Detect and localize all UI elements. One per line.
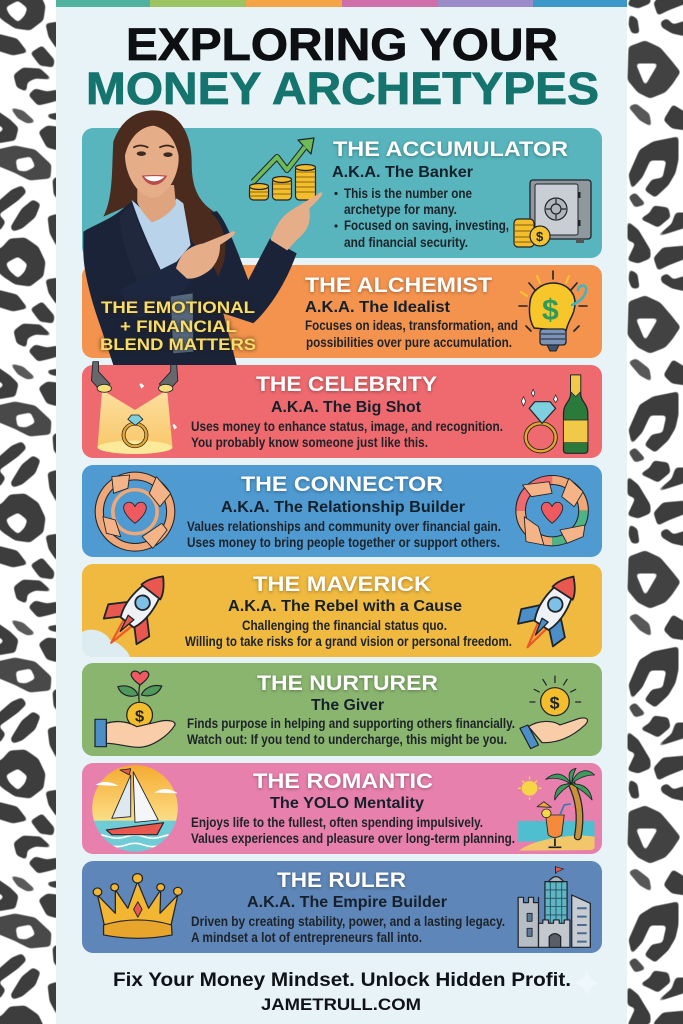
icon: safe with coins: $ (536, 229, 544, 244)
alias: The YOLO Mentality (270, 795, 424, 812)
top colour bar (56, 0, 627, 7)
description (191, 914, 505, 945)
description: Uses money to bring people together or support others. (187, 535, 500, 550)
panel: The Romantic (82, 763, 602, 854)
icon: hand with coin and rays: $ (550, 693, 560, 713)
icon: linked arms with heart (521, 478, 585, 545)
icon: coins with rising arrow (250, 138, 316, 200)
icon: hand with coin and rays (520, 676, 587, 749)
heading: THE ALCHEMIST (305, 274, 492, 297)
alias: The Giver (311, 697, 384, 714)
hair fringe (123, 119, 180, 165)
footer website: JAMETRULL.COM (261, 996, 421, 1014)
icon: red rocket (91, 560, 184, 659)
description (191, 419, 503, 450)
alias: A.K.A. The Relationship Builder (221, 499, 465, 516)
description (187, 519, 501, 550)
panel: The Maverick (82, 560, 602, 661)
heading: THE NURTURER (257, 672, 438, 695)
neck (137, 185, 176, 222)
callout: emotional and financial blend: + FINANCIAL (120, 317, 237, 336)
alias: A.K.A. The Idealist (305, 299, 451, 316)
callout: emotional and financial blend (100, 298, 256, 354)
bullet list: Focused on saving, investing, (344, 218, 509, 233)
alias: A.K.A. The Big Shot (271, 399, 422, 416)
figure: smiling woman pointing (83, 110, 322, 365)
bullet list (334, 186, 509, 250)
panel: The Ruler (82, 861, 602, 953)
footer tagline: Fix Your Money Mindset. Unlock Hidden Profit. (113, 969, 571, 991)
facial features (133, 145, 174, 185)
description: A mindset a lot of entrepreneurs fall into. (191, 930, 422, 945)
description: Uses money to enhance status, image, and recognition. (191, 419, 503, 434)
icon: hand with coin and plant (95, 671, 175, 747)
description: Values experiences and pleasure over long-term planning. (191, 831, 515, 846)
icon: safe with coins (514, 180, 591, 247)
heading: THE CELEBRITY (256, 373, 437, 396)
alias: A.K.A. The Banker (332, 164, 473, 181)
title (86, 19, 599, 114)
pointing hand right (271, 192, 322, 250)
alias: A.K.A. The Rebel with a Cause (228, 598, 462, 615)
panel: The Connector (82, 465, 602, 557)
panel: The Accumulator (82, 128, 602, 258)
description: Finds purpose in helping and supporting others financially. (187, 716, 515, 731)
panel: The Alchemist (82, 265, 602, 358)
icon: spotlights on ring (91, 362, 178, 454)
bullet list: This is the number one (344, 186, 472, 201)
description: You probably know someone just like this. (191, 435, 428, 450)
hair back (103, 110, 226, 277)
icon: circle of hands with heart (99, 475, 171, 548)
heading: THE ACCUMULATOR (333, 138, 568, 161)
face (125, 124, 179, 198)
description: Willing to take risks for a grand vision or personal freedom. (185, 634, 512, 649)
description: possibilities over pure accumulation. (306, 335, 512, 350)
description: Values relationships and community over financial gain. (187, 519, 501, 534)
description (185, 618, 512, 649)
heading: THE RULER (277, 869, 406, 892)
title: EXPLORING YOUR (126, 19, 558, 70)
callout: emotional and financial blend: BLEND MATTERS (100, 335, 256, 354)
panel: The Nurturer (82, 663, 602, 756)
pointing hand left (176, 231, 235, 279)
icon: gold crown (93, 874, 182, 938)
icon: light bulb with dollar sign (519, 271, 587, 351)
shirt (132, 198, 191, 272)
decorative cloud (82, 630, 130, 657)
title: MONEY ARCHETYPES (86, 63, 599, 114)
forearm (120, 262, 192, 318)
icon: blue rocket (506, 562, 595, 661)
bullet list: and financial security. (344, 235, 468, 250)
panel: The Celebrity (82, 362, 602, 458)
callout: emotional and financial blend: THE EMOTIONAL (101, 298, 255, 317)
description: Focuses on ideas, transformation, and (305, 318, 518, 333)
icon: ring and champagne (521, 375, 588, 453)
heading: THE ROMANTIC (253, 770, 433, 793)
bullet list: archetype for many. (344, 202, 457, 217)
description (305, 318, 518, 350)
lapel (119, 205, 160, 292)
icon: hand with coin and plant: $ (135, 709, 144, 725)
description: Driven by creating stability, power, and a lasting legacy. (191, 914, 505, 929)
icon: castle and skyscrapers (518, 867, 590, 947)
description (191, 815, 515, 846)
heading: THE MAVERICK (253, 573, 431, 596)
description: Challenging the financial status quo. (242, 618, 447, 633)
description (187, 716, 515, 747)
icon: beach with palm and cocktail (518, 768, 595, 851)
decorative sparkle (574, 970, 600, 996)
description: Watch out: If you tend to undercharge, this might be you. (187, 732, 507, 747)
heading: THE CONNECTOR (241, 473, 443, 496)
icon: sailboat at sunset (90, 763, 180, 854)
description: Enjoys life to the fullest, often spending impulsively. (191, 815, 483, 830)
hair front right (174, 162, 225, 277)
icon: light bulb with dollar sign: $ (542, 294, 559, 327)
jacket (83, 202, 297, 365)
alias: A.K.A. The Empire Builder (247, 894, 447, 911)
shirt lower (171, 293, 193, 353)
